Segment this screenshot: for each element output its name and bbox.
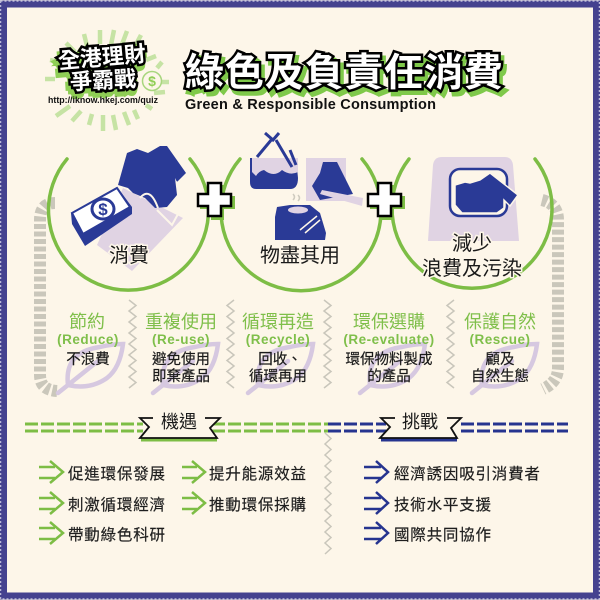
icon: reduce waste, shirt in washer: [428, 157, 519, 241]
challenges list: 經濟誘因吸引消費者: [394, 462, 541, 484]
column: Rescue: 保護自然: [464, 308, 536, 334]
window frame: [450, 169, 507, 216]
cash face: [72, 188, 130, 234]
circle arc 1: [49, 159, 209, 290]
column: Rescue: 自然生態: [471, 365, 529, 386]
icon: consumption bag, shirt and cash: [71, 146, 186, 271]
logo text line 1: 全港理財: [57, 36, 147, 76]
cash stack: [71, 187, 132, 246]
column: Re-use: 即棄產品: [152, 365, 210, 386]
column: Re-use: [145, 308, 217, 386]
ribbon: 挑戰: 挑戰: [402, 408, 438, 434]
column: Reduce: (Reduce): [57, 332, 119, 347]
label: 消費: 消費: [109, 239, 149, 268]
subtitle: Green & Responsible Consumption: [185, 97, 436, 113]
ribbon: 挑戰: [380, 408, 461, 440]
furoshiki bag: [250, 158, 298, 189]
logo url: http://iknow.hkej.com/quiz: [48, 95, 158, 105]
dashed line: opportunities: [25, 424, 330, 431]
leaf watermarks: [58, 344, 537, 393]
dashed line: challenges: [328, 424, 568, 431]
column: Reduce: 節約: [69, 308, 105, 334]
opportunities list: 推動環保採購: [209, 493, 307, 515]
column: Rescue: [464, 308, 536, 386]
opportunities list: [68, 462, 307, 545]
bag handle: [140, 182, 181, 225]
lilac bin: [428, 157, 519, 241]
title: [185, 42, 506, 102]
title shadow: 綠色及負責任消費: [188, 46, 506, 102]
shirt in window: [455, 173, 518, 213]
icon: consumption bag, shirt and cash: $: [98, 200, 108, 219]
circle arc 2: [221, 159, 381, 291]
gray dashed side belt right: [542, 200, 558, 389]
logo text shadow: [55, 40, 145, 101]
column: Recycle: 循環再造: [242, 308, 314, 334]
column: Recycle: (Recycle): [246, 332, 310, 347]
logo text line 2: 爭霸戰: [69, 61, 137, 97]
logo sun rays: [45, 30, 169, 131]
icon: reuse items: [250, 133, 363, 240]
column: Rescue: 顧及: [486, 348, 514, 369]
column: Reduce: 不浪費: [66, 348, 110, 369]
label: 減少浪費及污染: 浪費及污染: [422, 252, 522, 281]
challenges list: 技術水平支援: [394, 493, 492, 515]
circle arc 3: [392, 159, 552, 288]
ribbon: 機遇: [140, 408, 220, 440]
opportunities list: 提升能源效益: [209, 462, 307, 484]
label: 物盡其用: 物盡其用: [260, 239, 340, 268]
arrows: navy: [364, 461, 388, 544]
opportunities list: 促進環保發展: [68, 462, 166, 484]
logo text shadow: 全港理財: [55, 40, 145, 80]
dollar coin: [92, 199, 114, 219]
column: Re-evaluate: 環保選購: [353, 308, 425, 334]
column: Rescue: (Rescue): [469, 332, 531, 347]
shirt: [118, 146, 186, 208]
gray dashed side belt left: [40, 203, 57, 391]
teapot shirt: [275, 205, 326, 240]
column: Recycle: [242, 308, 314, 386]
challenges list: 國際共同協作: [394, 523, 492, 545]
column: Recycle: 回收、: [258, 348, 302, 369]
zigzag dividers: [129, 300, 454, 554]
knot handles: [257, 133, 296, 167]
column: Re-evaluate: 的產品: [367, 365, 411, 386]
opportunities list: 帶動綠色科研: [68, 523, 166, 545]
plus sign 2: [368, 183, 405, 220]
label: 減少浪費及污染: 減少: [452, 227, 492, 256]
column: Re-use: 避免使用: [152, 348, 210, 369]
column: Recycle: 循環再用: [249, 365, 307, 386]
logo: quiz badge: [45, 30, 169, 131]
column: Re-evaluate: 環保物料製成: [346, 348, 432, 369]
arrows: green: [39, 461, 205, 544]
opportunities list: 刺激循環經濟: [68, 493, 166, 515]
ribbon: 機遇: 機遇: [161, 408, 197, 434]
column: Re-evaluate: (Re-evaluate): [343, 332, 435, 347]
shopping bag: [97, 188, 183, 271]
logo coin icon: $: [148, 73, 156, 89]
column: Re-evaluate: [343, 308, 435, 386]
column: Re-use: 重複使用: [145, 308, 217, 334]
plus sign 1: [198, 183, 235, 220]
challenges list: [394, 462, 541, 545]
lilac square with scarf: [306, 158, 346, 201]
label: 減少浪費及污染: [422, 227, 522, 281]
logo text shadow: 爭霸戰: [67, 65, 135, 101]
column: Re-use: (Re-use): [152, 332, 210, 347]
column: Reduce: [57, 308, 119, 369]
title text: 綠色及負責任消費: [185, 42, 503, 98]
